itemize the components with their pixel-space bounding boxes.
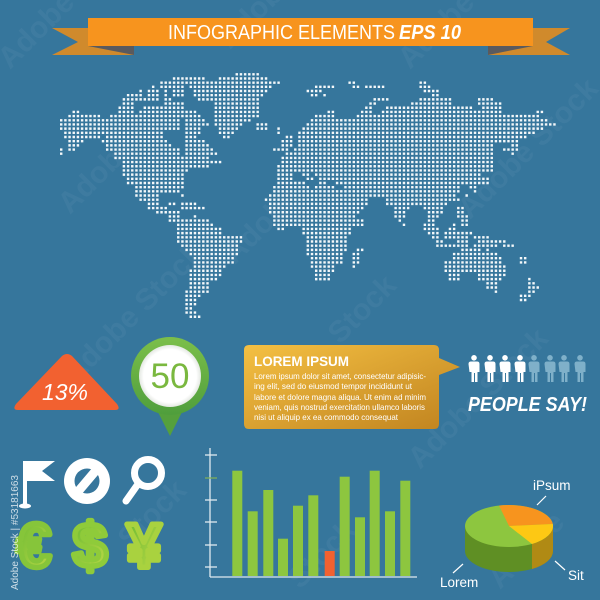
watermark: Adobe Stock xyxy=(402,322,555,475)
watermark: Adobe Stock xyxy=(57,237,210,390)
callout heading: LOREM IPSUM xyxy=(254,353,349,369)
callout body: veniam, quis nostrud exercitation ullamco laboris xyxy=(254,402,425,412)
icon: flag xyxy=(19,461,55,508)
pin value: 50 xyxy=(151,357,189,396)
percent triangle xyxy=(14,354,119,410)
people say label: PEOPLE SAY! xyxy=(468,394,587,416)
callout body: Lorem ipsum dolor sit amet, consectetur adipisic- xyxy=(254,371,426,381)
callout body: ing elit, sed do eiusmod tempor incididunt ut xyxy=(254,381,413,391)
watermark: Adobe xyxy=(482,506,571,595)
pie label: Lorem xyxy=(440,564,478,590)
pie label: iPsum: iPsum xyxy=(533,478,571,493)
icon: magnifier xyxy=(126,460,162,501)
pie label: iPsum xyxy=(533,478,571,505)
watermark: Adobe xyxy=(217,181,306,270)
callout body: nisi ut aliquip ex ea commodo consequat xyxy=(254,412,399,422)
banner ribbon xyxy=(52,18,570,55)
icon: yen: ¥ xyxy=(127,512,162,581)
icon: prohibited sign xyxy=(64,458,110,504)
icon: euro: € xyxy=(17,512,51,581)
bar chart xyxy=(205,448,417,577)
chart axes xyxy=(205,448,417,577)
pie label: Sit: Sit xyxy=(568,568,584,583)
stock id: Adobe Stock | #53181663 xyxy=(10,475,21,590)
dotted world map xyxy=(60,74,557,317)
watermark: Adobe xyxy=(52,131,141,220)
3d pie chart xyxy=(465,505,553,572)
callout box xyxy=(244,345,460,429)
callout body: labore et dolore magna aliqua. Ut enim ad minim xyxy=(254,392,426,402)
icon: dollar: $ xyxy=(73,512,107,581)
watermark: Stock xyxy=(112,474,193,555)
banner subtitle: EPS 10 xyxy=(399,22,461,44)
chart bars xyxy=(232,471,410,576)
pie label: Lorem: Lorem xyxy=(440,575,478,590)
watermark: Stock xyxy=(282,514,363,595)
callout body xyxy=(254,371,426,422)
percent value: 13% xyxy=(42,379,88,405)
map pin with value xyxy=(131,337,209,436)
watermark: Stock xyxy=(322,269,403,350)
people icons xyxy=(468,355,586,382)
pie label: Sit xyxy=(555,561,584,583)
banner title: INFOGRAPHIC ELEMENTS xyxy=(168,22,395,44)
